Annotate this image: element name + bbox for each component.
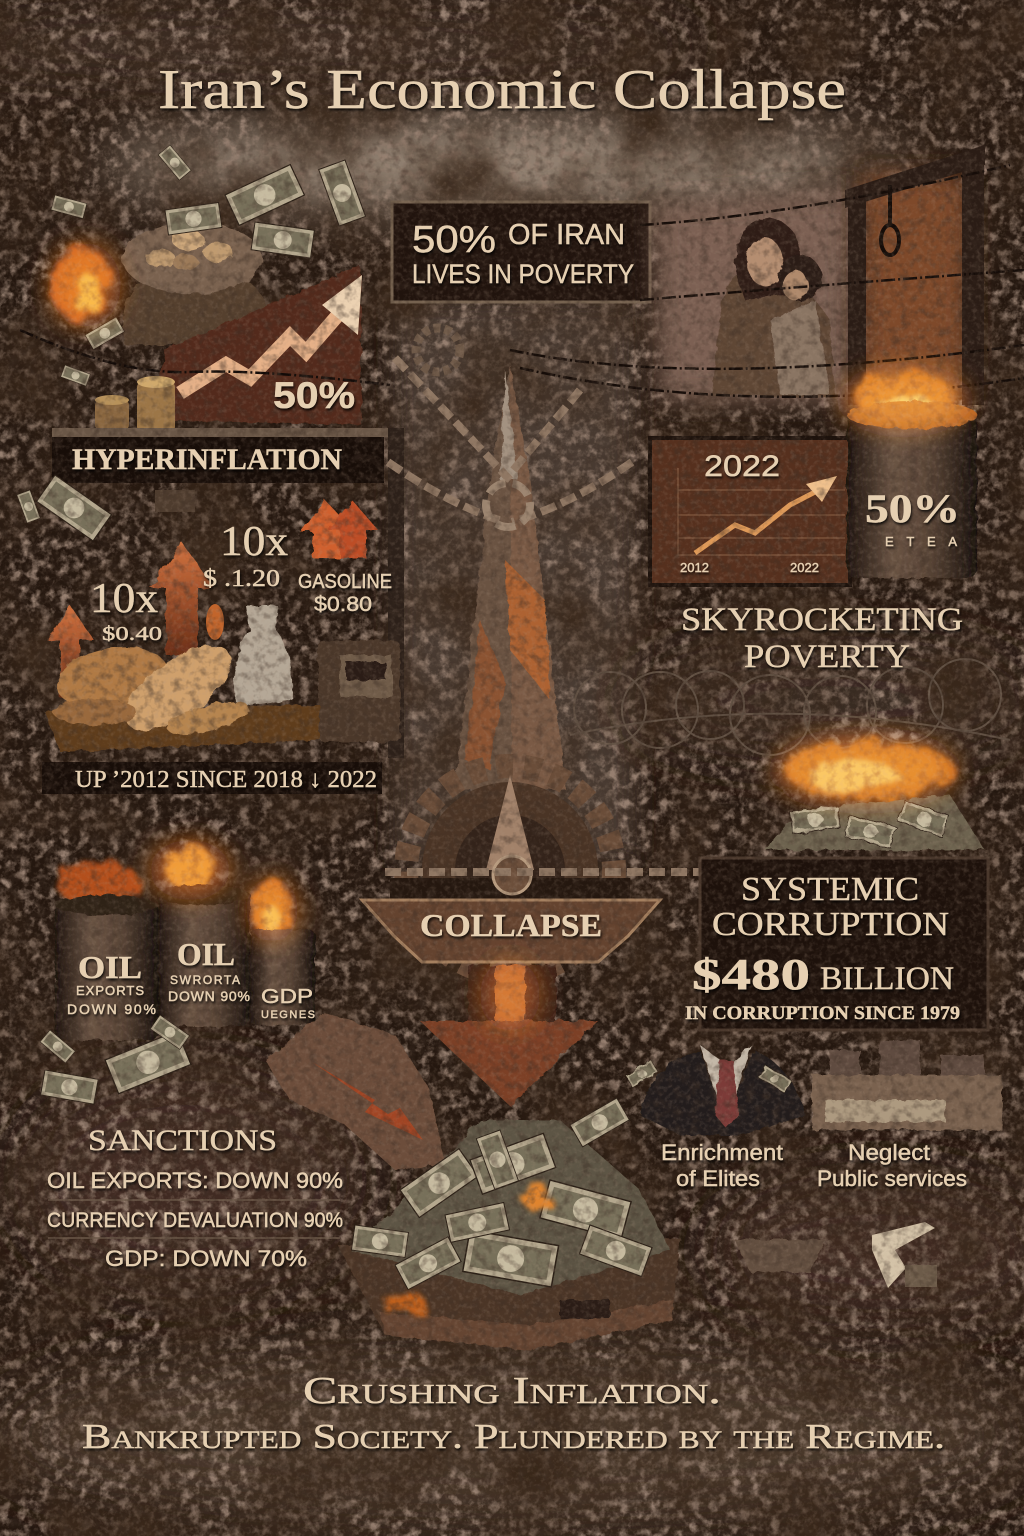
caption: enrichment of elites: Enrichment [661, 1140, 783, 1165]
caption: enrichment of elites [661, 1140, 783, 1191]
chart labels: 2022 [704, 450, 780, 483]
collapse banner shape [362, 900, 660, 962]
heading: skyrocketing poverty: POVERTY [744, 639, 910, 675]
chart labels: 2012 [680, 560, 709, 575]
icon: broken tool emblem [872, 1222, 937, 1288]
stat: chart 50 percent: 50% [273, 375, 355, 416]
stat: 50% of Iran [412, 219, 634, 289]
chart: rising arrow [150, 265, 362, 425]
chart: poverty line [650, 438, 850, 585]
caption: neglect public services: Public services [817, 1166, 967, 1191]
heading: skyrocketing poverty [681, 602, 963, 675]
price: gasoline: GASOLINE [298, 571, 392, 593]
panel: price increases [17, 428, 404, 794]
icon: hyperinflation label rail [52, 428, 404, 758]
stat: barrel 50 percent: 50% [865, 486, 960, 531]
barbed wire [20, 330, 390, 385]
price: 10x bread [90, 576, 162, 645]
price: 10x milk [203, 519, 288, 592]
footer slogan: Crushing Inflation. [303, 1370, 721, 1412]
icon: basin [735, 1240, 825, 1272]
stat: 480 billion [685, 950, 960, 1024]
icon: bread on board [45, 630, 320, 752]
price: 10x milk: 10x [220, 519, 288, 565]
barbed wire [510, 165, 1024, 397]
barrel labels: OIL [177, 936, 235, 972]
sanctions list: CURRENCY DEVALUATION 90% [47, 1209, 343, 1232]
icon: cash pile [765, 795, 985, 850]
barrel labels: EXPORTS [76, 983, 144, 998]
icon: barrel [847, 401, 977, 578]
banknotes [351, 1098, 652, 1290]
footer slogan [82, 1370, 945, 1456]
stat: barrel 50 percent [865, 486, 960, 549]
stat: 50% of Iran: LIVES IN POVERTY [412, 259, 634, 289]
panel: skyrocketing poverty [570, 372, 1010, 850]
icon: gas pump [318, 640, 400, 742]
center panel: scale and collapse [362, 202, 700, 1106]
icon: oil barrels [55, 885, 315, 1040]
heading: hyperinflation: HYPERINFLATION [72, 443, 342, 476]
barrel labels [67, 936, 315, 1021]
heading: systemic corruption: SYSTEMIC [741, 871, 919, 908]
barrel labels: DOWN 90% [67, 1001, 156, 1017]
panel backdrop [700, 858, 988, 1030]
heading: systemic corruption [712, 871, 949, 943]
icon: needle [486, 775, 534, 894]
icon: falling notes [40, 1015, 191, 1104]
sanctions list: GDP: DOWN 70% [105, 1246, 307, 1271]
icon: barrel flames [58, 844, 292, 942]
caption: enrichment of elites: of Elites [676, 1166, 760, 1191]
barrel labels: DOWN 90% [168, 988, 250, 1004]
icon: rust arrows [47, 500, 378, 698]
barrel labels: GDP [261, 986, 313, 1008]
cash embers [383, 1182, 551, 1317]
footer band [42, 762, 382, 794]
icon: chain knot [486, 483, 530, 527]
icon: down arrow [420, 965, 598, 1106]
suitcase [338, 1238, 680, 1350]
icon: scattered notes [17, 475, 195, 541]
price: gasoline: $0.80 [314, 593, 372, 616]
icon: cog [416, 328, 460, 372]
barrel labels: UEGNES [261, 1009, 315, 1021]
icon: obelisk [455, 365, 566, 790]
chart labels: 2022 [790, 560, 819, 575]
icon: ruined city [812, 1040, 1002, 1130]
caption: neglect public services [817, 1140, 967, 1191]
price: 10x bread: $0.40 [102, 623, 162, 645]
stat: 50% of Iran: OF IRAN [508, 219, 625, 251]
heading: systemic corruption: CORRUPTION [712, 906, 949, 943]
icon: gear [390, 766, 630, 974]
timeline caption: UP ʼ2012 SINCE 2018 ↓ 2022 [75, 767, 377, 793]
barrel labels: SWRORTA [170, 973, 240, 987]
stat box frame [392, 202, 650, 302]
panel: systemic corruption [625, 858, 1002, 1288]
heading: sanctions: SANCTIONS [88, 1124, 277, 1157]
chart labels [680, 450, 819, 575]
icon: chains [385, 358, 700, 872]
panel: top right scene [510, 145, 1024, 405]
icon: glow behind gallows [862, 175, 967, 400]
icon: burning barrel fire [855, 372, 955, 424]
stat: 480 billion: IN CORRUPTION SINCE 1979 [685, 1003, 960, 1024]
sanctions list: OIL EXPORTS: DOWN 90% [47, 1168, 343, 1193]
stat: 50% of Iran: 50% [412, 219, 496, 261]
title: Iran’s Economic Collapse [158, 59, 846, 121]
panel: sanctions barrels [40, 844, 445, 1238]
icon: cracked map with arrow [265, 1012, 445, 1170]
icon: money sack [122, 222, 269, 345]
banner text: COLLAPSE [420, 907, 602, 943]
fire glow [49, 243, 967, 1031]
price: 10x bread: 10x [90, 576, 158, 622]
stat: 480 billion: $480 [692, 950, 810, 999]
stat: 480 billion: BILLION [820, 961, 954, 997]
icon: fire behind sack [52, 247, 112, 323]
stat: barrel 50 percent: ETEA [885, 534, 957, 549]
scene backdrop [655, 190, 850, 400]
cash heap [350, 1120, 670, 1295]
icon: flying banknotes [51, 145, 366, 386]
price: 10x milk: $ .1.20 [203, 566, 280, 592]
icon: money pile and suitcase [338, 1098, 680, 1350]
icon: coin stacks [95, 376, 175, 432]
icon: fire over cash [785, 740, 955, 800]
barrel labels: OIL [78, 949, 142, 985]
price: gasoline [298, 571, 392, 616]
icon: suit [625, 1045, 805, 1135]
sanctions list [47, 1168, 343, 1271]
icon: noose [881, 185, 899, 255]
panel: hyperinflation [20, 145, 390, 432]
icon: gallows [845, 145, 985, 405]
icon: razor wire [570, 659, 1010, 755]
heading: skyrocketing poverty: SKYROCKETING [681, 602, 963, 638]
icon: bottle [234, 606, 293, 708]
icon: mother and child [712, 218, 835, 398]
footer slogan: Bankrupted Society. Plundered by the Regime. [82, 1417, 945, 1456]
icon: fire and flame [206, 604, 224, 640]
sanctions dividers [48, 1200, 340, 1238]
caption: neglect public services: Neglect [848, 1140, 930, 1165]
